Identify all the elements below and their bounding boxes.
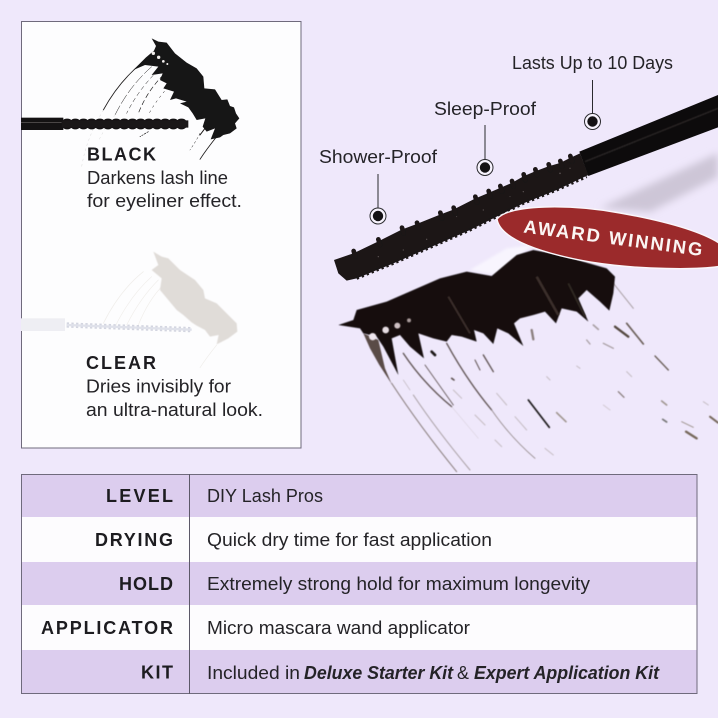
row: drying: Quick dry time for fast application (207, 530, 492, 550)
wand brush (334, 153, 588, 281)
row: hold: Extremely strong hold for maximum longevity (207, 574, 590, 594)
text: clear description (86, 376, 263, 420)
row: level (106, 486, 323, 506)
row: kit: KIT (141, 662, 173, 682)
text: clear description: an ultra-natural look. (86, 400, 263, 420)
mascara wand (334, 95, 718, 281)
text: black description: for eyeliner effect. (87, 191, 242, 211)
row: applicator (41, 618, 470, 638)
badge: award winning: AWARD WINNING (522, 216, 704, 260)
row: drying: DRYING (95, 530, 173, 550)
callout: lasts up to 10 days (512, 53, 673, 130)
row: kit: & (457, 663, 469, 683)
callout: shower-proof: Shower-Proof (319, 147, 438, 167)
row: level: DIY Lash Pros (207, 486, 323, 506)
heading: black: BLACK (87, 144, 156, 164)
badge: award winning (497, 207, 718, 269)
specification table (21, 474, 697, 694)
row: level: LEVEL (106, 486, 173, 506)
row: kit: Deluxe Starter Kit (304, 663, 454, 683)
text: clear description: Dries invisibly for (86, 376, 231, 396)
callout: sleep-proof: Sleep-Proof (434, 99, 537, 119)
swatch: black mascara wand and smear (21, 38, 239, 167)
heading: clear: CLEAR (86, 353, 156, 373)
row: kit: Included in (207, 663, 300, 683)
row: hold: HOLD (119, 574, 173, 594)
text: black description (87, 168, 242, 211)
panel: mascara shades (21, 22, 301, 448)
callout: sleep-proof (434, 99, 537, 176)
row: applicator: APPLICATOR (41, 618, 173, 638)
row: applicator: Micro mascara wand applicator (207, 618, 470, 638)
text: black description: Darkens lash line (87, 168, 228, 188)
swatch: clear mascara wand and smear (21, 252, 237, 368)
wand shadow (600, 153, 718, 212)
callout: shower-proof (319, 147, 438, 224)
callout: lasts up to 10 days: Lasts Up to 10 Days (512, 53, 673, 73)
row: drying (95, 530, 492, 550)
wand handle (579, 95, 718, 176)
row: kit (141, 662, 660, 683)
mascara smear on background (338, 245, 718, 472)
row: kit: Expert Application Kit (474, 663, 660, 683)
